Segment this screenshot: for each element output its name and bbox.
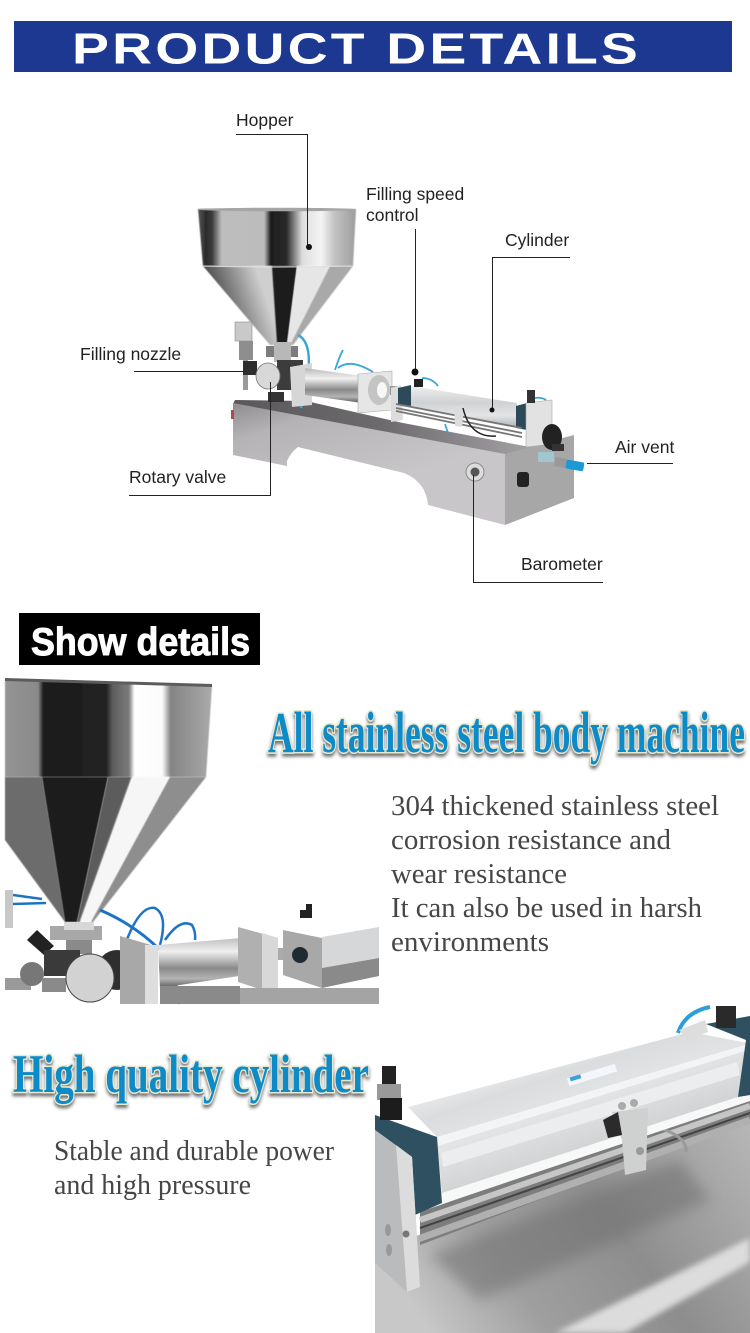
rotary valve and filling nozzle (235, 322, 303, 402)
material cylinder (158, 936, 266, 988)
table reflection (430, 1160, 710, 1300)
text block: stainless steel description: wear resistance (391, 859, 567, 890)
guide rod bed (420, 1097, 750, 1245)
callout: Hopper (236, 110, 312, 250)
title banner: PRODUCT DETAILS: PRODUCT DETAILS (72, 24, 641, 74)
text block: cylinder description: Stable and durable power (54, 1136, 335, 1167)
pneumatic cylinder segment (240, 904, 379, 1004)
mounting brackets (238, 927, 322, 995)
callout: Filling speed control: control (366, 205, 419, 225)
callout: Air vent (587, 437, 674, 464)
valve assembly (5, 922, 158, 1004)
blue hoses (13, 895, 195, 1004)
barometer (466, 463, 484, 481)
rear end cap and fitting (678, 1006, 750, 1097)
power socket (517, 472, 529, 487)
cylinder body (408, 1032, 750, 1204)
heading: Show details: Show details (31, 621, 250, 664)
text block: stainless steel description (391, 791, 719, 958)
text block: stainless steel description: environments (391, 927, 549, 958)
front end cap (375, 1115, 442, 1215)
cylinder support shadow (160, 986, 240, 1004)
hopper body (5, 678, 212, 922)
sensor clamp (603, 1099, 648, 1175)
callout: Air vent: Air vent (615, 437, 674, 457)
table highlight band (555, 1238, 750, 1333)
callout: Rotary valve: Rotary valve (129, 467, 226, 487)
title banner: PRODUCT DETAILS (14, 21, 732, 74)
callout: Hopper: Hopper (236, 110, 294, 130)
machine base (231, 400, 574, 525)
heading: High quality cylinder: High quality cylinder (13, 1044, 369, 1104)
text block: cylinder description: and high pressure (54, 1170, 251, 1201)
callout: Barometer: Barometer (521, 554, 603, 574)
callout: Filling speed control (366, 184, 464, 376)
guide rods (418, 1106, 750, 1239)
air fitting (377, 1066, 402, 1120)
blue hoses behind cylinder (298, 335, 546, 433)
text block: stainless steel description: corrosion resistance and (391, 825, 671, 856)
air regulator and vent (538, 424, 585, 471)
stainless table surface (375, 1115, 750, 1333)
machine diagram with callouts (80, 110, 674, 582)
material cylinder (290, 363, 403, 422)
photo panel: stainless steel hopper close-up (5, 677, 380, 1004)
callout: Filling nozzle: Filling nozzle (80, 344, 181, 364)
left support post (5, 890, 13, 928)
text block: stainless steel description: 304 thickened stainless steel (391, 791, 719, 822)
callout: Cylinder: Cylinder (505, 230, 569, 250)
photo panel: pneumatic cylinder close-up (375, 1005, 750, 1333)
callout: Filling speed control: Filling speed (366, 184, 464, 204)
hopper (198, 208, 356, 345)
callout: Cylinder (490, 230, 570, 412)
text block: cylinder description (54, 1136, 335, 1201)
text block: stainless steel description: It can also be used in harsh (391, 893, 702, 924)
aluminium end bracket (375, 1130, 420, 1292)
callout: Barometer (474, 475, 603, 582)
callout: Rotary valve (129, 382, 270, 496)
pneumatic cylinder (396, 379, 552, 447)
